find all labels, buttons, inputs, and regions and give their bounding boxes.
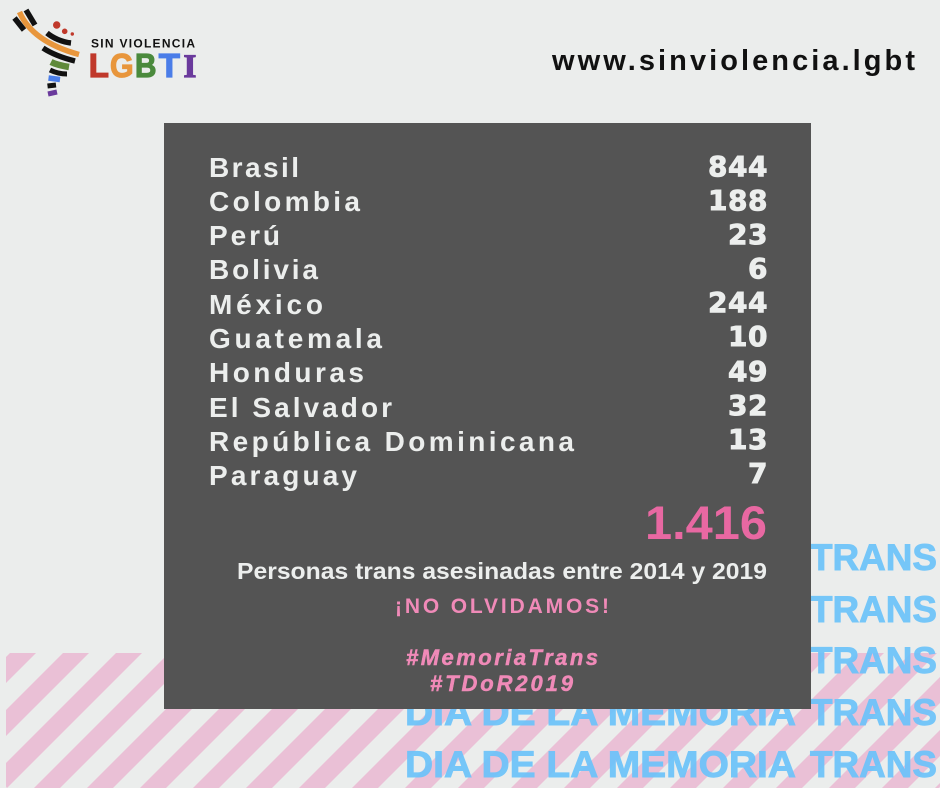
hashtag: TDoR2019: #TDoR2019	[430, 671, 574, 696]
numbers per country: 23	[728, 218, 768, 251]
country list: Guatemala	[209, 323, 382, 354]
country list	[209, 152, 574, 491]
panel: dark data panel	[164, 123, 811, 709]
country list: Bolivia	[209, 254, 318, 285]
logo text: LGBTI: L	[89, 47, 109, 84]
hashtag: MemoriaTrans: #MemoriaTrans	[406, 645, 598, 670]
repeated blue text: DIA DE LA MEMORIA TRANS: DIA DE LA MEMORIA	[405, 589, 796, 630]
numbers per country: 844	[708, 150, 768, 183]
country list: Colombia	[209, 186, 360, 217]
slogan: ¡NO OLVIDAMOS!	[395, 595, 609, 618]
country list: Paraguay	[209, 460, 357, 491]
icon: stylised Latin America map	[14, 10, 79, 94]
repeated blue text: DIA DE LA MEMORIA TRANS: DIA DE LA MEMORIA	[405, 744, 796, 785]
country list: México	[209, 289, 323, 320]
striped pink background band	[0, 643, 940, 788]
logo text: LGBTI	[89, 47, 196, 85]
repeated blue text: DIA DE LA MEMORIA TRANS: TRANS	[810, 537, 937, 578]
country list: Perú	[209, 220, 280, 251]
country list: Brasil	[209, 152, 299, 183]
logo text: SIN VIOLENCIA: SIN VIOLENCIA	[91, 36, 195, 50]
logo text: LGBTI: I	[184, 49, 196, 85]
caption: Personas trans asesinadas entre 2014 y 2019	[237, 558, 767, 584]
numbers per country: 32	[728, 389, 768, 422]
total figure: 1.416	[645, 496, 767, 549]
repeated blue text: DIA DE LA MEMORIA TRANS: DIA DE LA MEMORIA	[405, 537, 796, 578]
numbers per country: 188	[708, 184, 768, 217]
logo text: LGBTI: B	[135, 48, 156, 84]
repeated blue text: DIA DE LA MEMORIA TRANS	[405, 537, 937, 785]
repeated blue text: DIA DE LA MEMORIA TRANS: TRANS	[810, 744, 937, 785]
numbers per country: 244	[708, 286, 768, 319]
country list: El Salvador	[209, 392, 392, 423]
numbers per country: 7	[748, 457, 768, 490]
repeated blue text: DIA DE LA MEMORIA TRANS: DIA DE LA MEMORIA	[405, 692, 796, 733]
logo: Sin Violencia LGBTI	[14, 10, 196, 94]
numbers per country: 13	[728, 423, 768, 456]
numbers per country: 6	[748, 252, 768, 285]
logo text: LGBTI: G	[110, 47, 134, 84]
repeated blue text: DIA DE LA MEMORIA TRANS: TRANS	[810, 692, 937, 733]
repeated blue text: DIA DE LA MEMORIA TRANS: DIA DE LA MEMORIA	[405, 640, 796, 681]
repeated blue text: DIA DE LA MEMORIA TRANS: TRANS	[810, 640, 937, 681]
country list: Honduras	[209, 357, 364, 388]
website URL: www.sinviolencia.lgbt	[551, 45, 915, 77]
logo text: LGBTI: T	[159, 48, 180, 85]
numbers per country: 49	[728, 355, 768, 388]
repeated blue text: DIA DE LA MEMORIA TRANS: TRANS	[810, 589, 937, 630]
numbers per country: 10	[728, 320, 768, 353]
numbers per country	[708, 150, 768, 490]
country list: República Dominicana	[209, 426, 574, 457]
